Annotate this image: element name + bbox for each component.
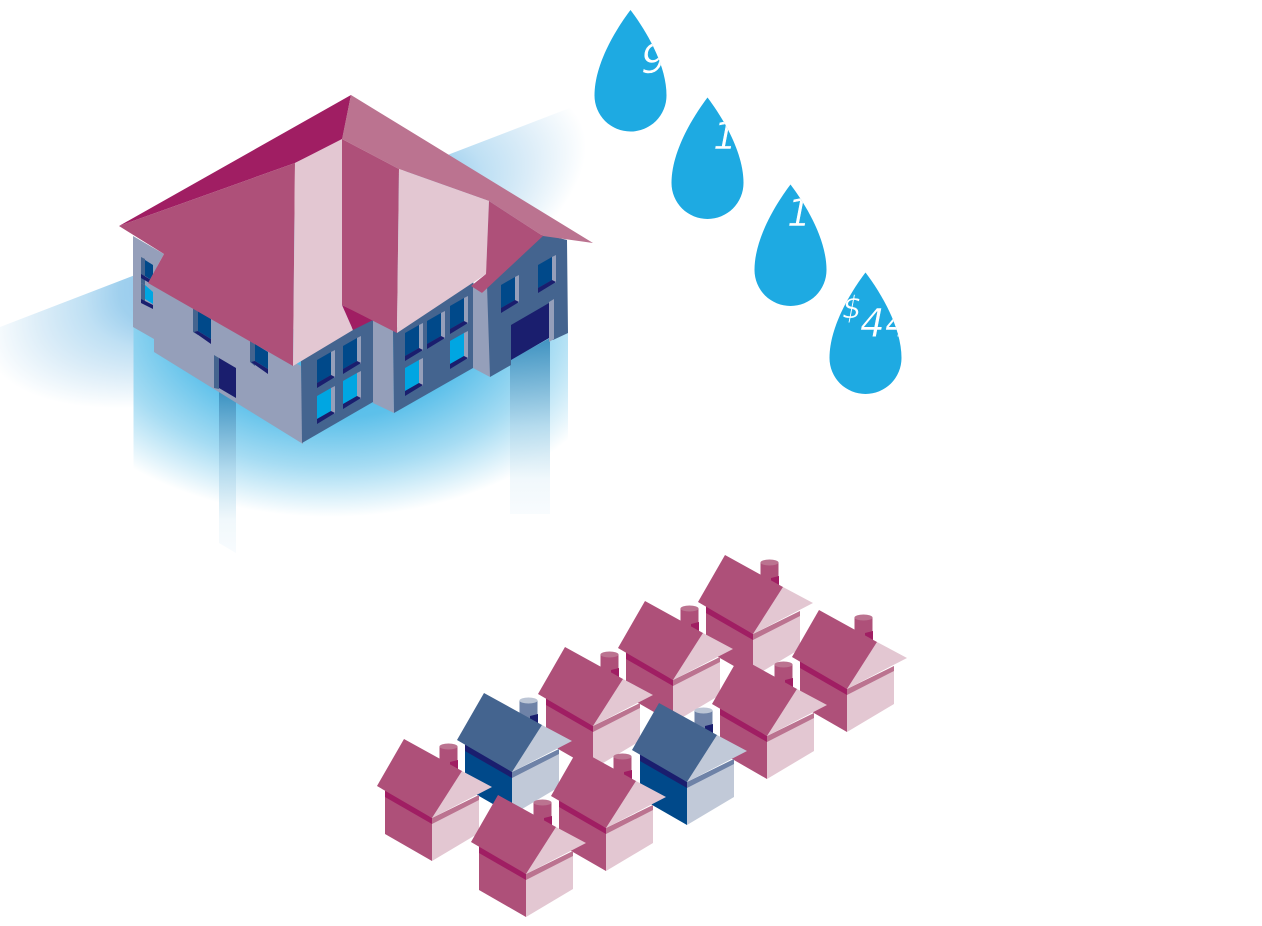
neighbourhood of small houses (377, 555, 907, 917)
front door (214, 355, 236, 398)
cost drop 2: 1 (713, 114, 737, 158)
left wall windows (141, 257, 268, 374)
cost drop 3 (754, 184, 826, 306)
roof: right light gable (397, 169, 489, 333)
cost drop 1 (594, 10, 666, 132)
house 3 (618, 601, 733, 723)
cost drop 4 (830, 272, 902, 394)
large flooded house (119, 95, 593, 444)
roof: shadow wedge (342, 305, 373, 330)
house 10 (471, 795, 586, 917)
centre wall (393, 282, 473, 413)
house 2 (792, 610, 907, 732)
right wall (487, 234, 568, 377)
roof: left face (119, 163, 295, 366)
house 9 (377, 739, 492, 861)
right wall windows (501, 255, 556, 313)
water stream from garage (510, 338, 550, 514)
flood water: vertical glow below house (134, 327, 568, 530)
cost drop 1: 9 (641, 37, 666, 83)
roof: middle face (342, 139, 399, 333)
roof: far left slope (119, 95, 351, 226)
cost drop 4: 44 (860, 302, 910, 347)
house 8 (551, 749, 666, 871)
cost drop 2 (672, 98, 744, 219)
front wall (301, 318, 373, 443)
house 1 (698, 555, 813, 677)
front and centre windows (317, 296, 468, 424)
roof: right face (471, 201, 543, 293)
pillar (373, 318, 394, 413)
house 6: highlighted blue (632, 703, 747, 825)
house 4 (712, 657, 827, 779)
pillar right (473, 282, 490, 377)
house 7: highlighted blue (457, 693, 572, 815)
cost drop 3: 1 (787, 191, 811, 235)
cost drop 4: $ (842, 290, 862, 326)
left wall (133, 236, 303, 444)
roof: far right slope (342, 95, 593, 243)
house 5 (538, 647, 653, 769)
flood water: ground glow behind house (0, 81, 640, 520)
garage door (511, 299, 554, 360)
roof: light gable (293, 139, 353, 366)
water stream from front door (219, 388, 236, 553)
